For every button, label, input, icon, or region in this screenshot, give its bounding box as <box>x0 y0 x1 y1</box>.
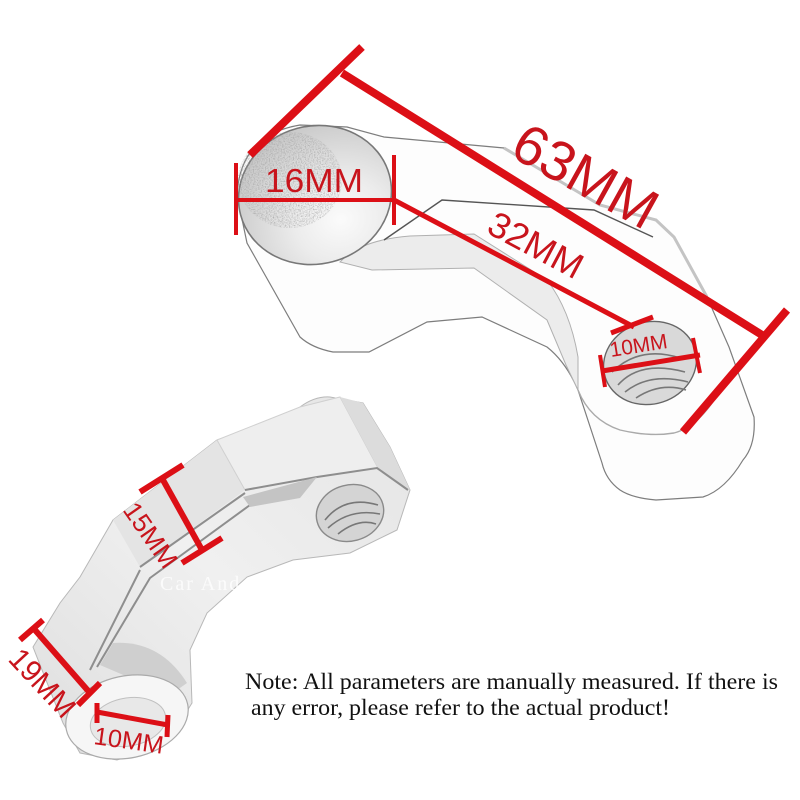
dimension: 15MM arm width: 15MM <box>117 496 184 574</box>
dimension: 19MM end height: 19MM <box>2 642 82 725</box>
dimension: 10MM end bore <box>92 703 168 760</box>
note text <box>245 669 778 720</box>
dimension: 32MM hole spacing <box>394 200 634 327</box>
top bracket illustration <box>223 108 754 500</box>
dimension: 10MM small bore top <box>600 317 700 387</box>
dimension: 63MM overall length <box>250 47 787 432</box>
bottom bracket threaded hole <box>310 477 390 549</box>
faint watermark text: Car And Motorcycle Accessory Parts Store <box>160 573 584 595</box>
dimension: 10MM small bore top: 10MM <box>608 330 669 362</box>
dimension: 19MM end height <box>2 620 100 725</box>
dimension: 10MM end bore: 10MM <box>92 722 165 760</box>
small threaded hole <box>593 309 707 417</box>
large round end face <box>223 108 407 282</box>
dimension: 15MM arm width <box>117 465 222 574</box>
dimension: 16MM large bore: 16MM <box>265 162 363 199</box>
bottom bracket illustration <box>33 397 410 770</box>
note text: any error, please refer to the actual product! <box>251 695 670 720</box>
note text: Note: All parameters are manually measured. If there is <box>245 669 778 694</box>
dimension: 32MM hole spacing: 32MM <box>481 203 591 287</box>
dimension: 63MM overall length: 63MM <box>502 110 669 241</box>
bottom bracket end face <box>58 664 196 770</box>
